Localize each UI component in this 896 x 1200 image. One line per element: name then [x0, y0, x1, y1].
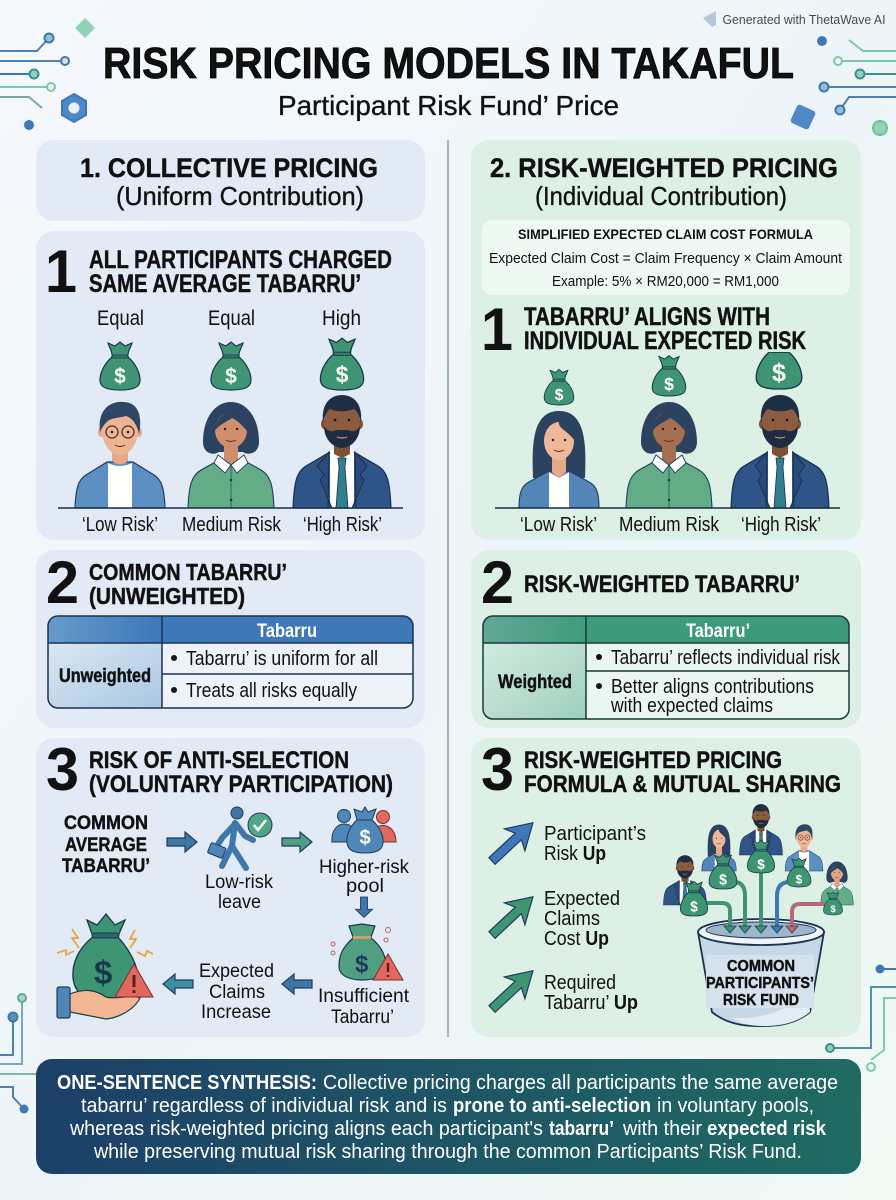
- step heading: FORMULA & MUTUAL SHARING: [524, 771, 841, 798]
- label: low-risk leave: [205, 872, 273, 913]
- contribution labels: Equal: [208, 307, 255, 330]
- label: common average tabarru: COMMON: [64, 813, 148, 834]
- panel: collective pricing header: (Uniform Contribution): [116, 181, 364, 211]
- label: insufficient tabarru: Insufficient: [318, 986, 410, 1007]
- icons: contribution money bags: $: [757, 857, 765, 872]
- table: weighted: Tabarru’: [686, 621, 750, 642]
- label: higher-risk pool: [319, 857, 409, 897]
- panel: risk-weighted header and step 1: [471, 140, 861, 540]
- icon: medium money bag: $: [664, 374, 674, 394]
- icon: contributing participants: [663, 804, 853, 905]
- risk labels: Medium Risk: [182, 514, 282, 536]
- table: weighted: [483, 616, 849, 719]
- icon: large money bag: $: [772, 359, 786, 387]
- heading: risk-weighted pricing: (Individual Contribution): [535, 181, 787, 211]
- step heading: RISK-WEIGHTED TABARRU’: [524, 571, 800, 598]
- panel: one-sentence synthesis: whereas risk-weighted pricing aligns each participant's: [69, 1118, 543, 1140]
- table: weighted: Tabarru’ reflects individual risk: [611, 647, 841, 669]
- table: unweighted: Tabarru’ is uniform for all: [186, 647, 378, 670]
- decoration: top-right circuit: [790, 36, 896, 135]
- arrow: [282, 832, 312, 852]
- panel: one-sentence synthesis: tabarru’ regardless of individual risk and is: [81, 1095, 447, 1117]
- risk labels: ‘Low Risk’: [520, 514, 597, 536]
- step heading: RISK-WEIGHTED PRICING: [524, 747, 782, 774]
- panel: collective step 1: [36, 231, 425, 540]
- label: common average tabarru: [62, 813, 150, 877]
- panel: one-sentence synthesis: expected risk: [707, 1118, 827, 1140]
- watermark: Generated with ThetaWave AI: [722, 13, 886, 27]
- icon: small money bag: [544, 369, 574, 405]
- label: insufficient tabarru: Tabarru’: [331, 1007, 394, 1028]
- table: unweighted: Unweighted: [59, 666, 151, 687]
- panel: one-sentence synthesis: [36, 1059, 861, 1174]
- label: expected claims increase: Expected: [199, 961, 274, 982]
- icons: contribution money bags: $: [719, 873, 727, 889]
- icons: contribution money bags: [680, 840, 843, 916]
- risk labels: [82, 514, 382, 536]
- formula box: [482, 220, 850, 295]
- step heading: [89, 246, 392, 298]
- label: participant's risk up: Risk Up: [544, 843, 606, 865]
- icon: money bag high: [320, 338, 364, 390]
- panel: one-sentence synthesis: prone to anti-selection: [453, 1095, 651, 1117]
- icon: common participants' risk fund bucket: RISK FUND: [723, 992, 799, 1009]
- icon: large money bag: [756, 352, 802, 390]
- subtitle: Participant Risk Fund’ Price: [278, 90, 619, 121]
- icon: common participants' risk fund bucket: [698, 919, 824, 1026]
- panel: one-sentence synthesis: while preserving mutual risk sharing through the common Participants’ Risk Fund.: [93, 1141, 802, 1163]
- icons: contribution money bags: $: [690, 898, 698, 915]
- contribution labels: [97, 307, 361, 330]
- icon: walking person leaving: [207, 807, 272, 868]
- label: expected claims cost up: Cost Up: [544, 928, 609, 950]
- label: higher-risk pool: Higher-risk: [319, 857, 409, 878]
- arrow down: [356, 897, 372, 917]
- risk labels: [520, 514, 821, 536]
- step heading: [89, 559, 287, 609]
- risk labels: ‘High Risk’: [741, 514, 821, 536]
- icon: hand holding money bag with warning: [57, 914, 153, 1019]
- icon: higher-risk pool: $: [359, 827, 371, 849]
- contribution labels: High: [322, 307, 361, 330]
- panel: collective pricing header: 1. COLLECTIVE PRICING: [80, 153, 378, 183]
- table: unweighted: [48, 616, 413, 708]
- arrow up: required tabarru: [482, 960, 543, 1020]
- step number 3: 3: [46, 736, 79, 803]
- step number 1: 1: [481, 296, 513, 363]
- heading: risk-weighted pricing: 2. RISK-WEIGHTED PRICING: [490, 153, 838, 183]
- decoration: bottom-right circuit: [826, 964, 896, 1071]
- panel: collective step 3: [36, 736, 425, 1037]
- person: low risk: [75, 402, 165, 508]
- step number 1: 1: [45, 238, 77, 305]
- step number 3: 3: [481, 736, 514, 803]
- risk labels: Medium Risk: [619, 514, 720, 536]
- panel: risk-weighted step 2: [471, 549, 861, 728]
- label: participant's risk up: Participant’s: [544, 823, 646, 845]
- icon: hand holding money bag with warning: $: [94, 954, 112, 991]
- person: low risk: [519, 411, 599, 508]
- icon: small money bag: $: [555, 387, 564, 404]
- decoration: bottom-left circuit: [0, 994, 36, 1114]
- formula box: Expected Claim Cost = Claim Frequency × Claim Amount: [489, 250, 843, 267]
- formula box: Example: 5% × RM20,000 = RM1,000: [552, 273, 779, 290]
- heading: risk-weighted pricing: [490, 153, 838, 211]
- label: common average tabarru: TABARRU’: [62, 856, 150, 877]
- step heading: TABARRU’ ALIGNS WITH: [524, 303, 770, 331]
- column divider: [447, 140, 449, 1037]
- step heading: (VOLUNTARY PARTICIPATION): [89, 771, 393, 798]
- label: expected claims increase: [199, 961, 274, 1023]
- contribution labels: Equal: [97, 307, 144, 330]
- table: weighted: with expected claims: [610, 695, 773, 717]
- icon: money bag high: $: [336, 361, 349, 387]
- label: common average tabarru: AVERAGE: [65, 835, 147, 856]
- arrow left: [282, 974, 312, 994]
- risk labels: ‘Low Risk’: [82, 514, 158, 536]
- title: RISK PRICING MODELS IN TAKAFUL: [103, 39, 794, 88]
- person: high risk: [293, 395, 391, 508]
- step heading: ALL PARTICIPANTS CHARGED: [89, 246, 392, 274]
- panel: one-sentence synthesis: ONE-SENTENCE SYNTHESIS:: [57, 1072, 317, 1094]
- risk labels: ‘High Risk’: [303, 514, 382, 536]
- label: expected claims cost up: Expected: [544, 888, 620, 910]
- label: participant's risk up: [544, 823, 646, 865]
- icons: contribution money bags: $: [830, 904, 836, 915]
- arrow: [167, 832, 197, 852]
- panel: collective pricing header: [36, 140, 425, 221]
- label: required tabarru up: [544, 972, 638, 1014]
- icons: contribution money bags: $: [796, 872, 803, 886]
- person: high risk: [731, 395, 829, 508]
- panel: one-sentence synthesis: with their: [622, 1118, 702, 1140]
- person: medium risk: [188, 402, 274, 508]
- step heading: SAME AVERAGE TABARRU’: [89, 270, 361, 298]
- step heading: COMMON TABARRU’: [89, 559, 287, 585]
- table: weighted: Better aligns contributions: [611, 676, 814, 698]
- step heading: [524, 303, 806, 355]
- arrow up: expected claims: [482, 886, 543, 946]
- step number 2: 2: [46, 549, 79, 616]
- label: required tabarru up: Required: [544, 972, 616, 994]
- table: unweighted: Tabarru: [257, 621, 317, 642]
- label: low-risk leave: leave: [218, 892, 261, 913]
- icon: higher-risk pool: [332, 807, 396, 853]
- panel: one-sentence synthesis: in voluntary pools,: [657, 1095, 814, 1117]
- icon: money bag equal medium: [211, 342, 251, 390]
- label: insufficient tabarru: [318, 986, 410, 1028]
- icon: insufficient money bag: $: [355, 951, 369, 978]
- icon: insufficient money bag: [331, 924, 403, 980]
- table: weighted: Weighted: [498, 672, 572, 693]
- icon: money bag equal low: $: [114, 365, 126, 388]
- flow arrows into fund: [705, 870, 825, 933]
- person: medium risk: [626, 402, 712, 508]
- step heading: RISK OF ANTI-SELECTION: [89, 747, 349, 774]
- arrow up: participant risk: [482, 812, 543, 872]
- label: expected claims increase: Increase: [201, 1002, 271, 1023]
- step heading: (UNWEIGHTED): [89, 583, 245, 609]
- label: expected claims cost up: Claims: [544, 908, 600, 930]
- step heading: [524, 747, 841, 798]
- panel: one-sentence synthesis: Collective pricing charges all participants the same average: [323, 1072, 838, 1094]
- icon: money bag equal medium: $: [225, 365, 237, 388]
- label: low-risk leave: Low-risk: [205, 872, 273, 893]
- panel: one-sentence synthesis: tabarru’: [549, 1118, 614, 1140]
- decoration: top-left circuit: [0, 18, 95, 130]
- arrow left: [163, 974, 193, 994]
- label: required tabarru up: Tabarru’ Up: [544, 992, 638, 1014]
- step heading: INDIVIDUAL EXPECTED RISK: [524, 327, 806, 355]
- step heading: [89, 747, 393, 798]
- step number 2: 2: [481, 549, 514, 616]
- icon: money bag equal low: [100, 342, 140, 390]
- label: higher-risk pool: pool: [346, 876, 384, 897]
- label: expected claims increase: Claims: [209, 982, 265, 1003]
- icon: common participants' risk fund bucket: PARTICIPANTS’: [706, 975, 814, 992]
- table: unweighted: Treats all risks equally: [186, 679, 358, 702]
- panel: collective step 2: [36, 549, 425, 728]
- icon: common participants' risk fund bucket: COMMON: [727, 958, 795, 975]
- formula box: SIMPLIFIED EXPECTED CLAIM COST FORMULA: [518, 226, 813, 242]
- icon: medium money bag: [652, 356, 686, 396]
- label: expected claims cost up: [544, 888, 620, 950]
- panel: risk-weighted step 3: [471, 736, 861, 1037]
